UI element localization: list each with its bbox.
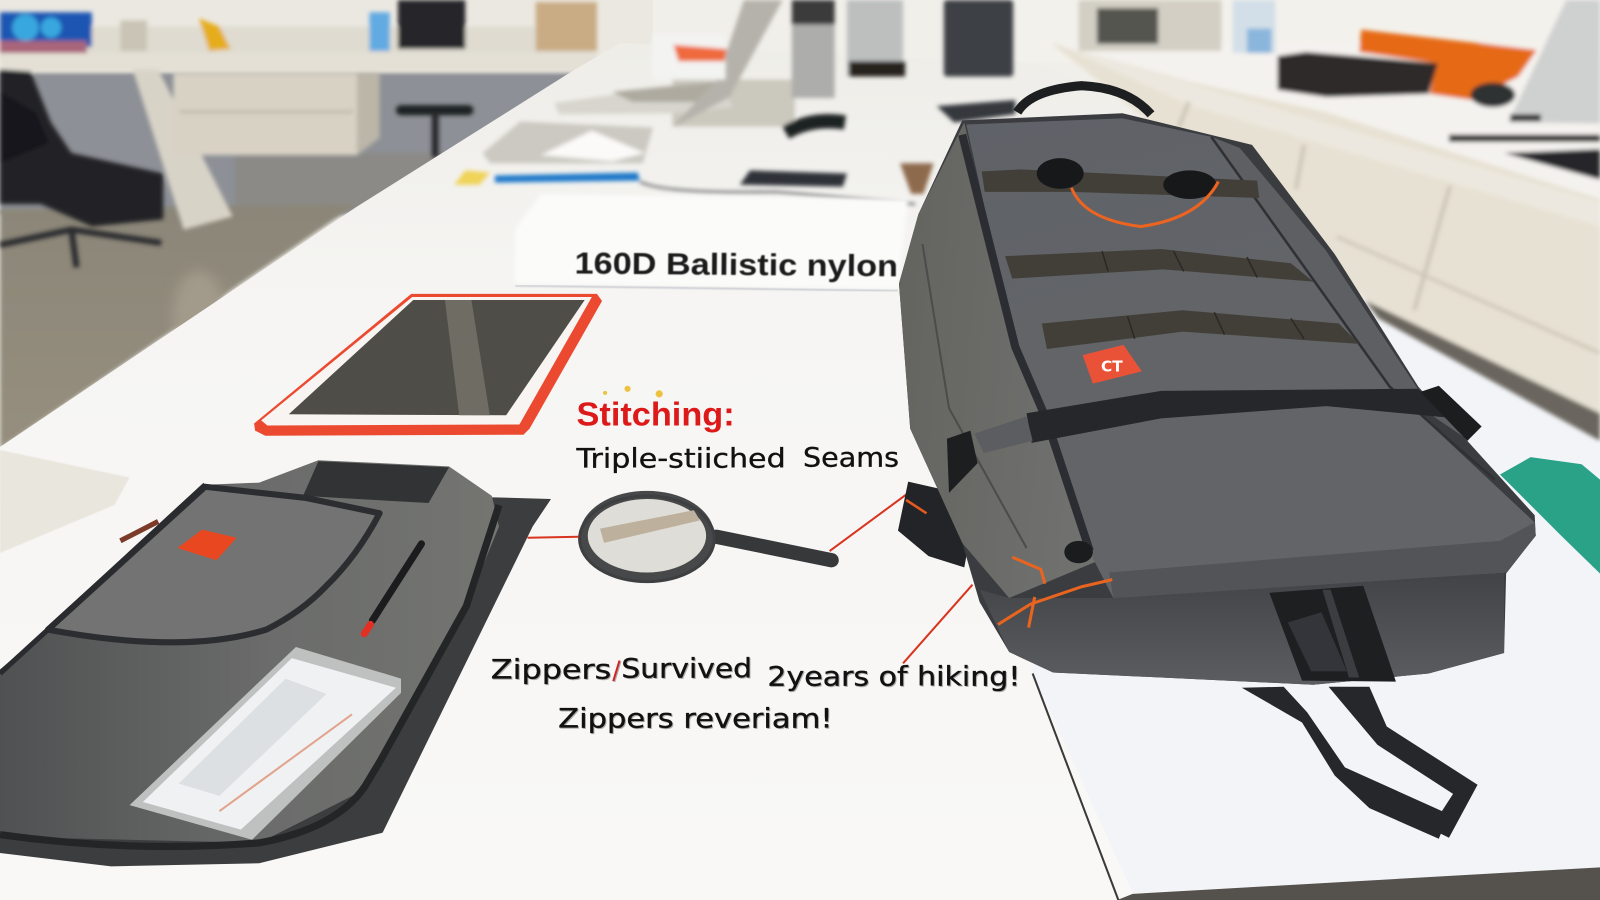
green cords bbox=[1500, 457, 1600, 573]
zipper pull bbox=[1064, 541, 1093, 563]
pouch collar bbox=[303, 461, 449, 503]
document in clear sleeve bbox=[130, 647, 401, 840]
orange cord bbox=[1071, 182, 1218, 227]
text: stitching title: Stitching: bbox=[577, 397, 735, 434]
text: zipper durability line one: Survived bbox=[621, 654, 752, 685]
lid edge stripe bbox=[1211, 137, 1469, 441]
backpack bbox=[899, 86, 1536, 839]
right side seam bbox=[1211, 137, 1495, 480]
black compression strap bbox=[1027, 389, 1456, 443]
text: stitching description: Seams bbox=[803, 442, 899, 473]
webbing strap 1 bbox=[982, 169, 1259, 198]
strap loops bbox=[1037, 158, 1216, 199]
pouch bbox=[0, 460, 551, 866]
backpack silhouette bbox=[899, 113, 1536, 685]
dark bundle beside backpack bbox=[898, 482, 967, 567]
logo patch: CT bbox=[1101, 357, 1123, 375]
heading: stitching bbox=[577, 386, 735, 434]
text: stitching description bbox=[575, 442, 899, 474]
logo patch bbox=[1083, 345, 1142, 384]
pen bbox=[364, 544, 421, 634]
webbing stitches bbox=[1102, 251, 1304, 339]
paper stack at left edge bbox=[0, 450, 130, 553]
pouch back panel bbox=[0, 497, 551, 866]
magnifier lens bbox=[584, 495, 710, 577]
background: left desk and chair bbox=[0, 0, 597, 267]
right table section bbox=[1031, 286, 1600, 900]
callout lines bbox=[528, 494, 972, 663]
top handle bbox=[1017, 86, 1151, 114]
text: fabric label: 160D Ballistic nylon bbox=[574, 246, 898, 283]
webbing strap 2 bbox=[1005, 249, 1313, 282]
sparkle dots bbox=[603, 386, 663, 397]
shoulder strap loop bbox=[1242, 687, 1478, 839]
magnifying glass bbox=[580, 495, 832, 582]
orange corner ties bbox=[998, 557, 1112, 628]
pouch flap bbox=[48, 487, 380, 642]
webbing strap 3 bbox=[1042, 310, 1359, 349]
background: laptop, bottles and desk clutter bbox=[454, 0, 1015, 204]
text: zipper durability line two: Zippers reveriam! bbox=[558, 704, 833, 735]
lid front lip bbox=[1109, 522, 1536, 598]
tablet with red case bbox=[254, 294, 602, 436]
left buckle bbox=[947, 416, 1033, 493]
label card: material bbox=[515, 194, 908, 291]
side seam bbox=[922, 244, 1027, 548]
text: zipper durability line one: Zippers bbox=[491, 655, 611, 686]
text: stitching description: Triple-stiiched bbox=[575, 443, 786, 474]
text: zipper durability line one: 2years of hiking! bbox=[767, 662, 1020, 693]
tablet screen bbox=[289, 300, 585, 415]
lower buckles bbox=[1269, 586, 1396, 682]
right buckle bbox=[1420, 386, 1482, 441]
text: zipper durability line one bbox=[491, 654, 1020, 693]
pouch zip pull bbox=[120, 521, 158, 541]
main lid bbox=[966, 118, 1536, 598]
pouch orange patch bbox=[178, 530, 237, 560]
side panel bbox=[899, 122, 1097, 598]
background: right counter and cabinets bbox=[1051, 0, 1600, 441]
main zipper bbox=[962, 135, 1090, 551]
lower compartment bbox=[980, 572, 1504, 685]
pouch zipper bbox=[0, 505, 499, 847]
magnifier handle bbox=[716, 537, 832, 560]
pouch grey body bbox=[0, 460, 499, 843]
text: zipper durability line one: / bbox=[612, 656, 621, 685]
